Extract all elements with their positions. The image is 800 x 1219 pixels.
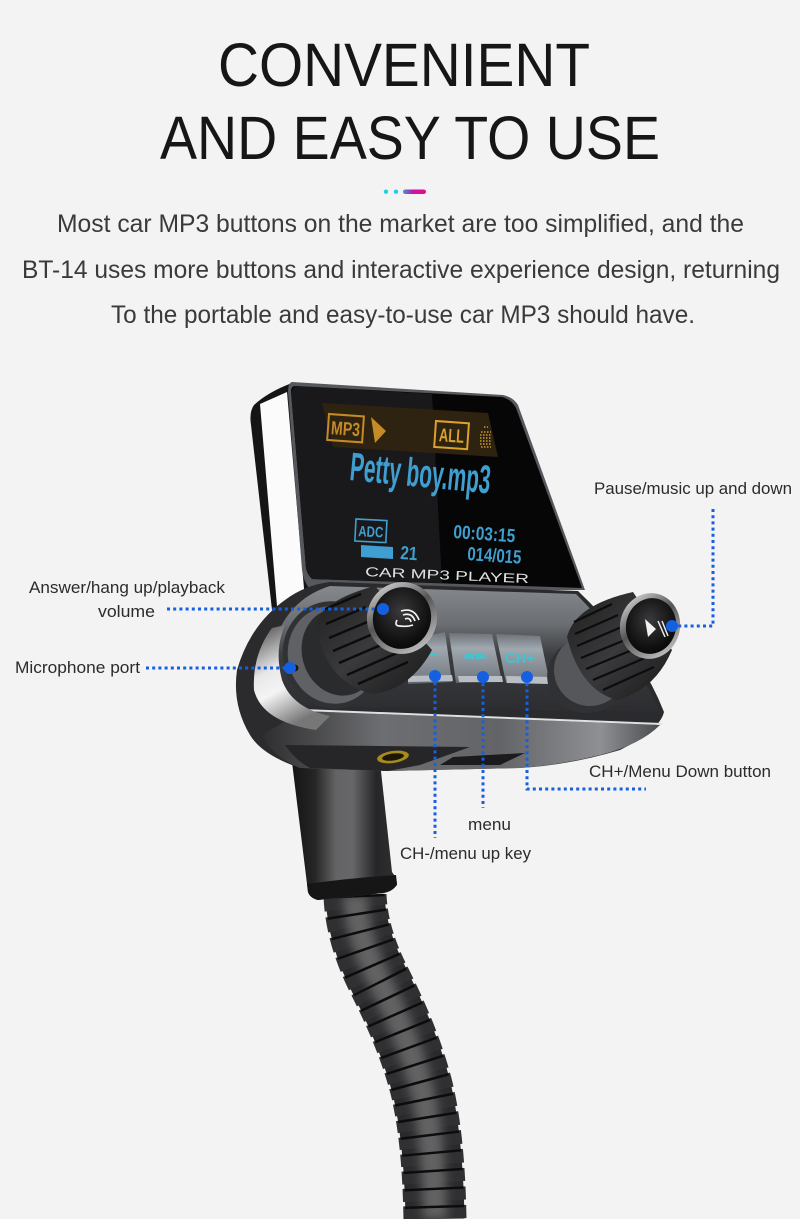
callout leader lines [146,506,713,838]
player caption: CAR MP3 PLAYER [365,564,529,586]
silver seam [303,710,662,724]
signal value: 21 [400,543,418,565]
menu buttons [408,632,551,684]
icon: ALL badge [434,421,469,449]
button labels [426,650,535,667]
silver left bevel [254,625,330,730]
track name: Petty boy.mp3 [348,445,493,502]
dark bottom wedge [285,745,470,771]
silver side band [250,383,312,610]
callout labels: volume [98,602,155,621]
callout anchor dots [284,603,678,683]
callout labels: menu [468,815,511,834]
track counter: 014/015 [467,544,522,569]
callout labels: CH-/menu up key [400,844,531,863]
dark body shell [236,582,664,771]
knob face: play/pause icon [614,587,686,665]
neck collar [292,762,397,900]
audio jack [376,749,410,765]
callout labels: Pause/music up and down [594,479,792,498]
accent: dots and gradient bar [384,190,426,194]
icon: MP3 badge: MP3 [330,418,361,441]
screen bezel [288,382,585,590]
callout labels [15,479,792,863]
icon: ADC badge: ADC [358,523,384,541]
callout labels: Answer/hang up/playback [29,578,225,597]
control body [236,574,686,771]
top panel [272,586,660,712]
icon: dotted battery [480,427,492,447]
title: AND EASY TO USE [160,104,660,172]
intro paragraph [22,210,780,329]
title: CONVENIENT [218,31,590,99]
icon: ALL badge: ALL [438,425,465,448]
right knob [539,587,686,722]
icon: play triangle [371,417,386,443]
white highlight on side band [260,392,305,606]
signal bar [361,545,393,559]
callout labels: CH+/Menu Down button [589,762,771,781]
elapsed time: 00:03:15 [453,522,516,547]
intro paragraph: Most car MP3 buttons on the market are too simplified, and the [57,210,744,238]
flexible gooseneck hose [355,895,435,1219]
icon: ADC badge [355,519,387,543]
amber status band [322,403,498,457]
knob face: phone icon [359,574,445,662]
intro paragraph: To the portable and easy-to-use car MP3 should have. [111,301,695,329]
USB slot [440,753,525,765]
glass sheen [291,386,442,583]
left knob [271,574,445,720]
black screen [291,386,582,588]
intro paragraph: BT-14 uses more buttons and interactive experience design, returning [22,256,780,284]
icon: MP3 badge [327,414,364,442]
device display unit [250,382,585,610]
front lip [262,711,660,771]
microphone hole [291,664,299,672]
title [160,31,660,172]
button labels: CH+ [505,650,535,667]
callout labels: Microphone port [15,658,140,677]
